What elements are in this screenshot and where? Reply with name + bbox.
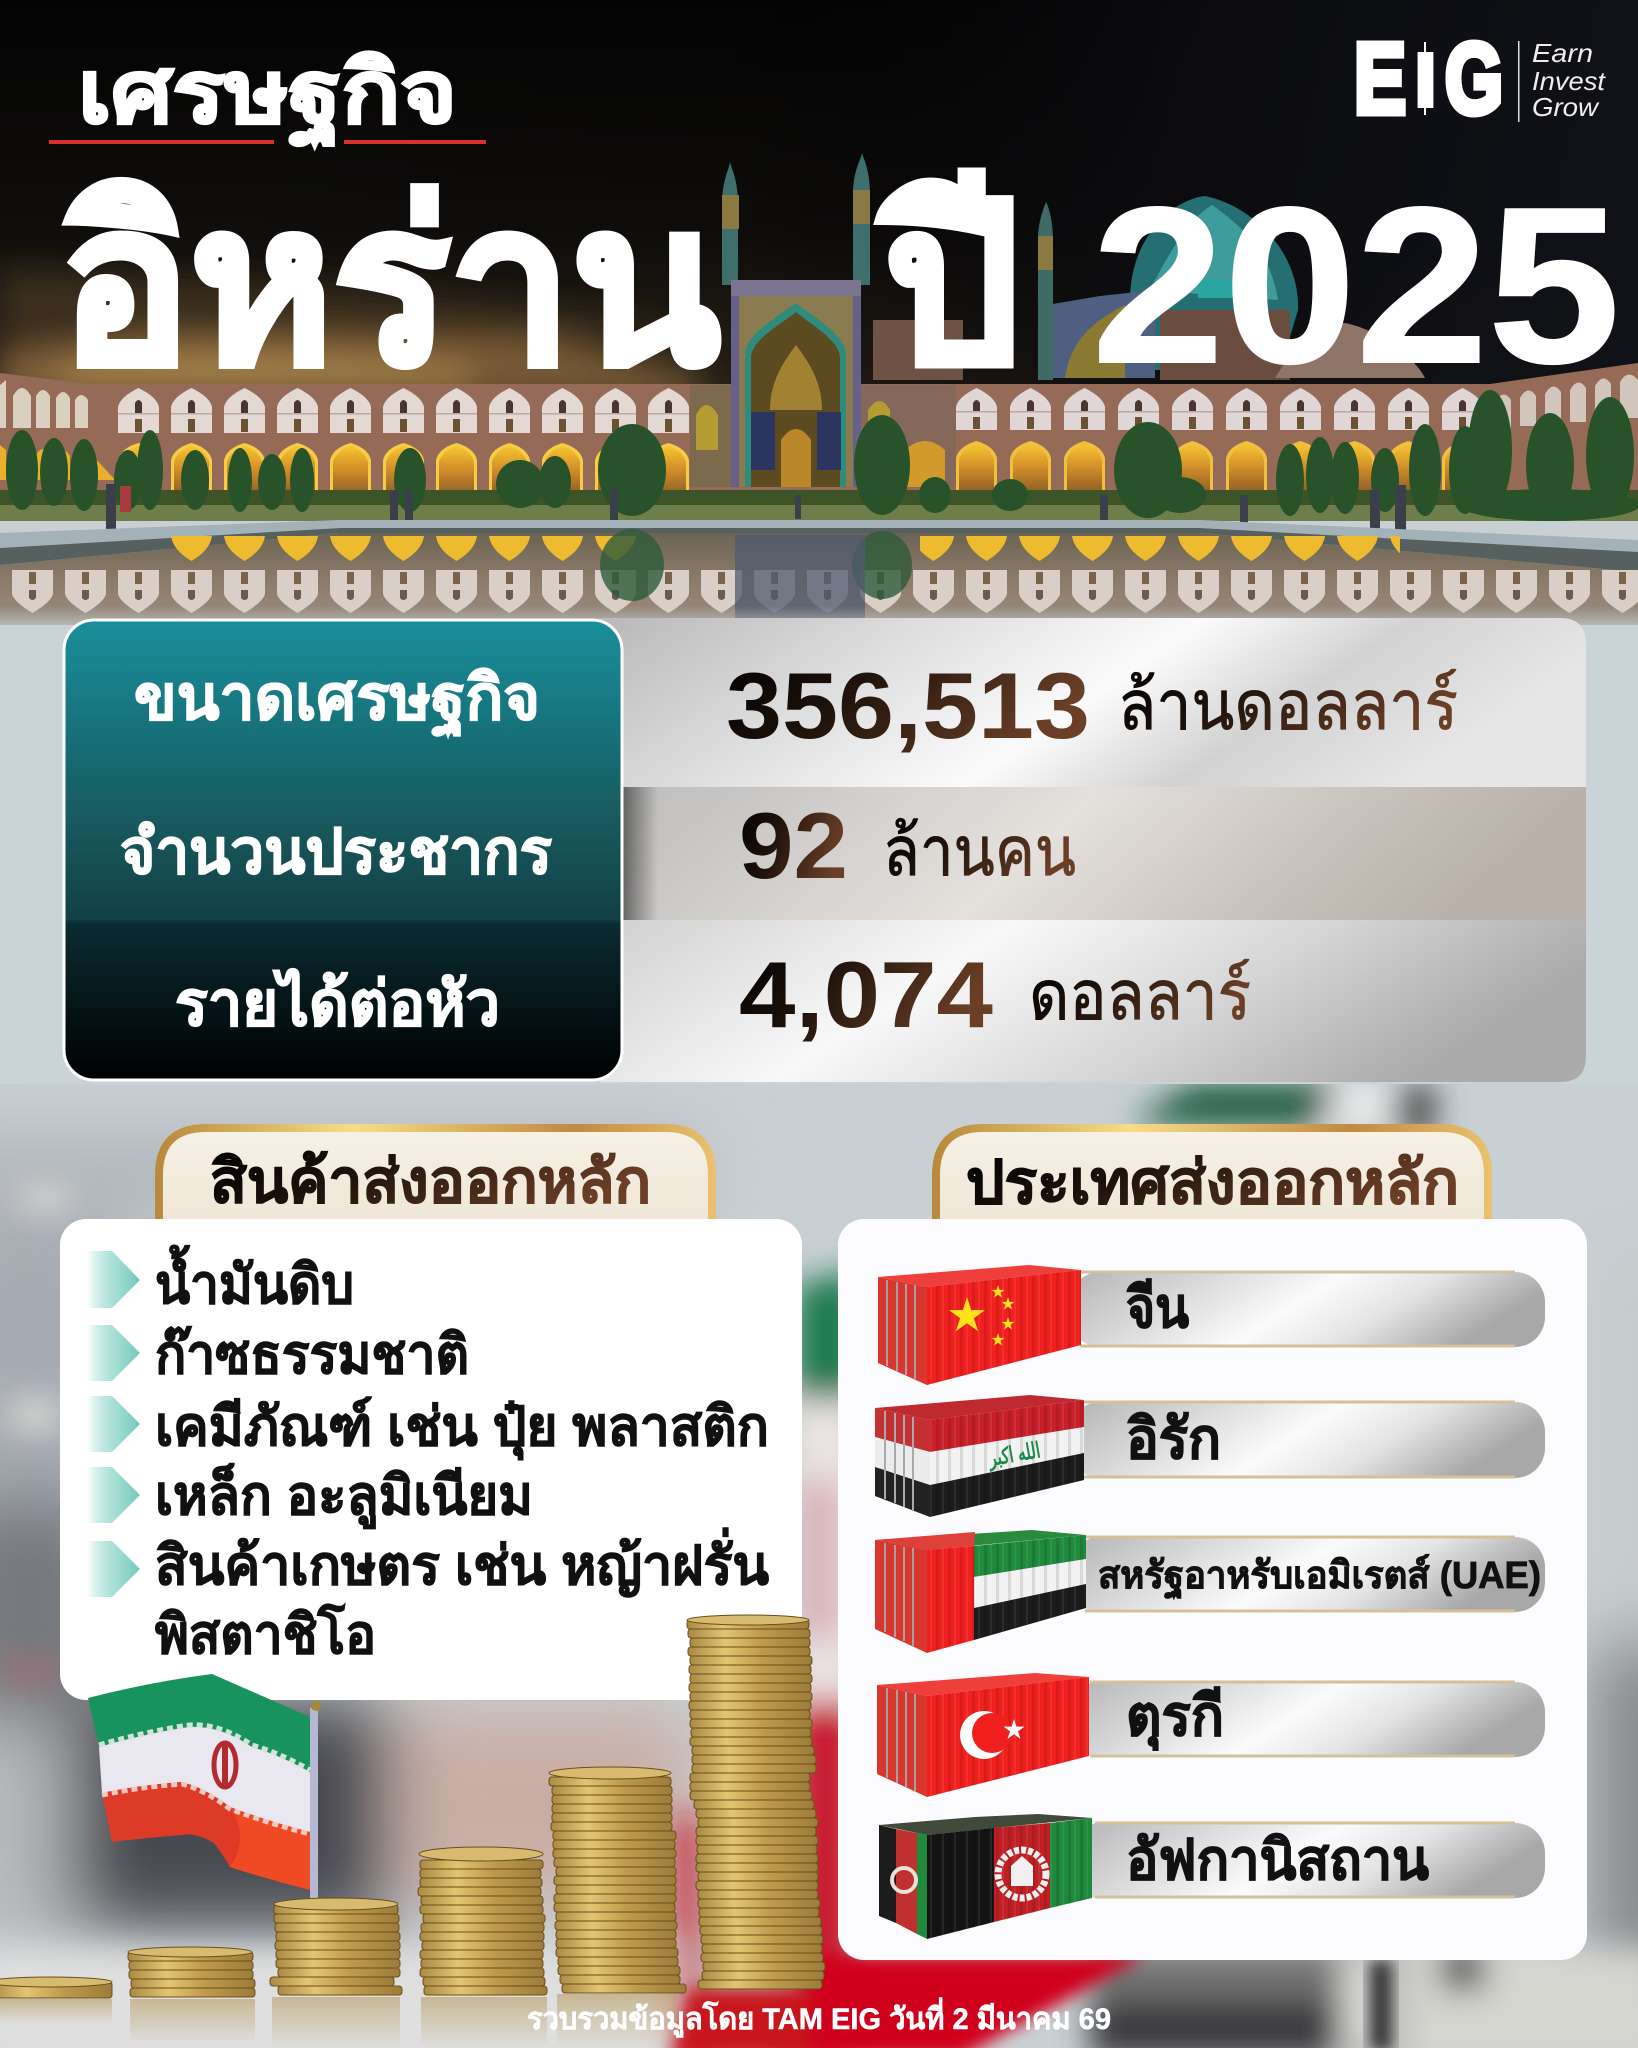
row: Turkey: ตุรกี xyxy=(1126,1684,1224,1751)
pool xyxy=(0,533,1638,625)
goods list xyxy=(155,1245,769,1665)
heading tab xyxy=(159,1128,712,1225)
portal xyxy=(731,280,861,487)
hedge and grass xyxy=(0,490,1638,508)
goods list: สินค้าเกษตร เช่น หญ้าฝรั่น xyxy=(155,1527,769,1597)
goods list: น้ำมันดิบ xyxy=(155,1245,354,1315)
logo: EIG: I xyxy=(1417,41,1434,119)
value: GDP xyxy=(726,653,1458,758)
label: ขนาดเศรษฐกิจ: ขนาดเศรษฐกิจ xyxy=(134,664,540,738)
white card xyxy=(838,1219,1587,1960)
label: รายได้ต่อหัว: รายได้ต่อหัว xyxy=(175,968,500,1039)
logo: EIG xyxy=(1354,23,1607,135)
white card xyxy=(60,1219,802,1700)
main dome xyxy=(1130,196,1298,370)
goods list: เหล็ก อะลูมิเนียม xyxy=(155,1464,533,1529)
bullet arrows xyxy=(87,1251,140,1597)
logo: EIG: E xyxy=(1354,23,1406,135)
value: income per head: ดอลลาร์ xyxy=(1029,958,1251,1034)
row: Turkey xyxy=(877,1673,1545,1797)
plaza and pool rim xyxy=(0,520,1638,552)
illustration: Iranian flag xyxy=(88,1674,321,1898)
title: อิหร่าน ปี 2025: 2025 xyxy=(1092,162,1620,410)
left perspective arches xyxy=(0,380,88,428)
value: income per head: 4,074 xyxy=(739,942,993,1047)
goods list: เคมีภัณฑ์ เช่น ปุ๋ย พลาสติก xyxy=(155,1396,769,1461)
panel: main export goods xyxy=(60,1128,802,1700)
orange clouds xyxy=(0,270,700,400)
stack 4 xyxy=(418,1847,547,1995)
value: GDP: 356,513 xyxy=(726,653,1090,758)
value: income per head xyxy=(739,942,1251,1047)
value: population xyxy=(739,793,1076,898)
logo: EIG: Invest xyxy=(1532,66,1607,96)
photo: Isfahan mosque scene xyxy=(0,0,1638,1084)
stack 5 xyxy=(549,1767,686,1993)
stack 2 xyxy=(128,1947,255,1997)
title: อิหร่าน ปี 2025: ปี xyxy=(877,162,1020,410)
panel: main export destinations xyxy=(838,1128,1587,1960)
logo: EIG: G xyxy=(1445,23,1503,135)
row: Iraq: อิรัก xyxy=(1126,1407,1221,1470)
arcade building xyxy=(0,363,1638,510)
stack 3 xyxy=(270,1898,402,1995)
row: China xyxy=(878,1265,1545,1385)
label: จำนวนประชากร: จำนวนประชากร xyxy=(120,818,552,887)
trees xyxy=(6,390,1638,521)
goods list: พิสตาชิโอ xyxy=(155,1603,376,1665)
row: UAE: สหรัฐอาหรับเอมิเรตส์ (UAE) xyxy=(1098,1554,1541,1600)
title: อิหร่าน ปี 2025: อิหร่าน xyxy=(60,162,720,410)
illustration: rising coin stacks xyxy=(0,1615,825,2048)
title: เศรษฐกิจ: เศรษฐกิจ xyxy=(78,45,457,149)
stack 1 xyxy=(0,1977,112,1998)
goods list: ก๊าซธรรมชาติ xyxy=(155,1325,469,1385)
row: Afghanistan: อัฟกานิสถาน xyxy=(1126,1828,1429,1891)
logo: EIG: Grow xyxy=(1532,92,1600,122)
minarets xyxy=(722,162,738,285)
row: UAE xyxy=(875,1530,1545,1653)
row: Iraq: الله اكبر xyxy=(985,1437,1042,1472)
footer source note: รวบรวมข้อมูลโดย TAM EIG วันที่ 2 มีนาคม 69 xyxy=(527,1997,1111,2038)
row: China: จีน xyxy=(1126,1276,1189,1339)
value: population: 92 xyxy=(739,793,848,898)
label column xyxy=(64,620,622,1080)
title: อิหร่าน ปี 2025 xyxy=(60,162,1620,410)
heading tab xyxy=(936,1128,1488,1225)
rear brown wall and beige dome xyxy=(873,320,963,380)
row: Iraq xyxy=(875,1395,1545,1517)
logo: EIG: Earn xyxy=(1532,38,1593,68)
coin reflections on the floor xyxy=(0,1994,677,2048)
heading tab: ประเทศส่งออกหลัก xyxy=(966,1149,1459,1216)
value: population: ล้านคน xyxy=(883,814,1076,890)
panel: key statistics xyxy=(64,618,1586,1082)
side wing xyxy=(1041,290,1155,378)
right perspective arches xyxy=(1495,374,1638,428)
stack 6 xyxy=(687,1615,825,1989)
heading tab: สินค้าส่งออกหลัก xyxy=(210,1148,651,1215)
people xyxy=(106,484,1406,538)
value: GDP: ล้านดอลลาร์ xyxy=(1118,668,1458,744)
reflection xyxy=(171,536,641,564)
stat rows metallic background xyxy=(600,618,1586,1082)
row: Afghanistan xyxy=(879,1814,1545,1939)
